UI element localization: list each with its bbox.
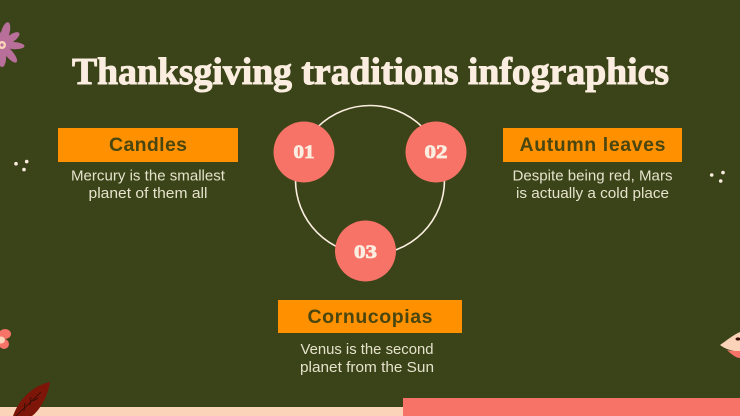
icon: coral flower: [0, 329, 11, 349]
decorative dots: right: [710, 171, 725, 183]
label: candles: Candles: [109, 134, 187, 156]
decorative dots: left: [14, 160, 29, 171]
text: candles description: planet of them all: [88, 186, 208, 202]
title: Thanksgiving traditions infographics: [72, 51, 669, 93]
icon: turkey at right edge: [720, 332, 740, 358]
step 03: 03: [354, 242, 377, 263]
label: cornucopias: [278, 300, 462, 333]
label: autumn leaves: [503, 128, 682, 162]
label: candles: [58, 128, 238, 162]
panel: autumn leaves: [503, 128, 682, 202]
text: autumn leaves description: is actually a cold place: [516, 186, 669, 202]
step 03: [335, 220, 396, 282]
step 01: 01: [294, 142, 314, 163]
step 02: [406, 122, 466, 182]
step 02: 02: [424, 142, 448, 163]
step 01: [274, 122, 334, 182]
icon: pink flower: [0, 21, 25, 67]
text: cornucopias description: planet from the Sun: [300, 360, 434, 376]
panel: candles: [58, 128, 238, 202]
ring connecting the numbered circles: [296, 106, 444, 254]
label: autumn leaves: Autumn leaves: [520, 134, 666, 156]
text: autumn leaves description: Despite being red, Mars: [512, 168, 672, 184]
bottom band: coral: [403, 398, 740, 416]
label: cornucopias: Cornucopias: [308, 306, 433, 328]
icon: red leaf: [13, 382, 50, 416]
panel: cornucopias: [278, 300, 462, 376]
text: candles description: Mercury is the smallest: [71, 168, 225, 184]
text: cornucopias description: Venus is the second: [300, 342, 434, 358]
bottom band: peach: [0, 407, 404, 416]
